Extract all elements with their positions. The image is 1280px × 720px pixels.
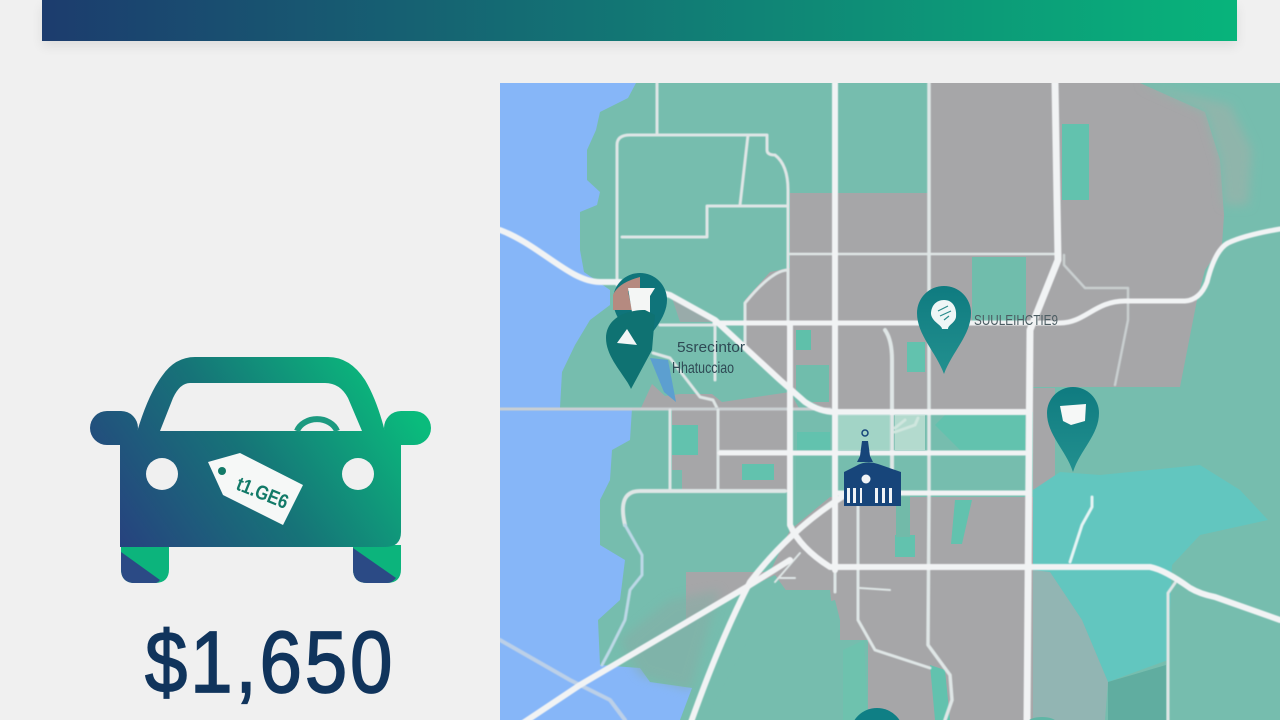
map: green parks xyxy=(672,124,1089,557)
car: headlights xyxy=(146,458,374,490)
car: body and roof xyxy=(120,357,401,547)
pin: front left xyxy=(606,310,655,389)
car: price tag: t1.GE6 xyxy=(233,473,291,514)
pin: centre top xyxy=(917,286,971,374)
car: wheels xyxy=(121,545,401,583)
pin: right xyxy=(1047,387,1099,472)
pin: back left xyxy=(613,273,667,331)
label: left pins: Hhatucciao xyxy=(672,360,734,377)
pin: bottom xyxy=(854,708,900,720)
label: centre pin: SUULEIHCTIE9 xyxy=(974,312,1058,329)
label: left pins xyxy=(673,341,745,373)
price figure: $1,650 xyxy=(145,614,395,711)
map: lower green area xyxy=(786,590,868,720)
map: roads xyxy=(500,83,1280,720)
map: water area xyxy=(500,83,692,720)
map: turquoise lake xyxy=(1033,465,1268,682)
header bar xyxy=(42,0,1237,46)
map: grey urban blocks xyxy=(640,83,1224,720)
pin: bottom right hint xyxy=(1028,717,1056,720)
icon: car with price tag xyxy=(90,357,431,583)
car: price tag xyxy=(208,453,303,525)
icon: city hall xyxy=(844,430,901,506)
car: mirrors xyxy=(90,411,431,445)
panel: city map xyxy=(500,83,1280,720)
map: blue inlet xyxy=(650,358,676,402)
label: left pins: 5srecintor xyxy=(677,339,745,356)
car: key ring xyxy=(297,419,337,431)
